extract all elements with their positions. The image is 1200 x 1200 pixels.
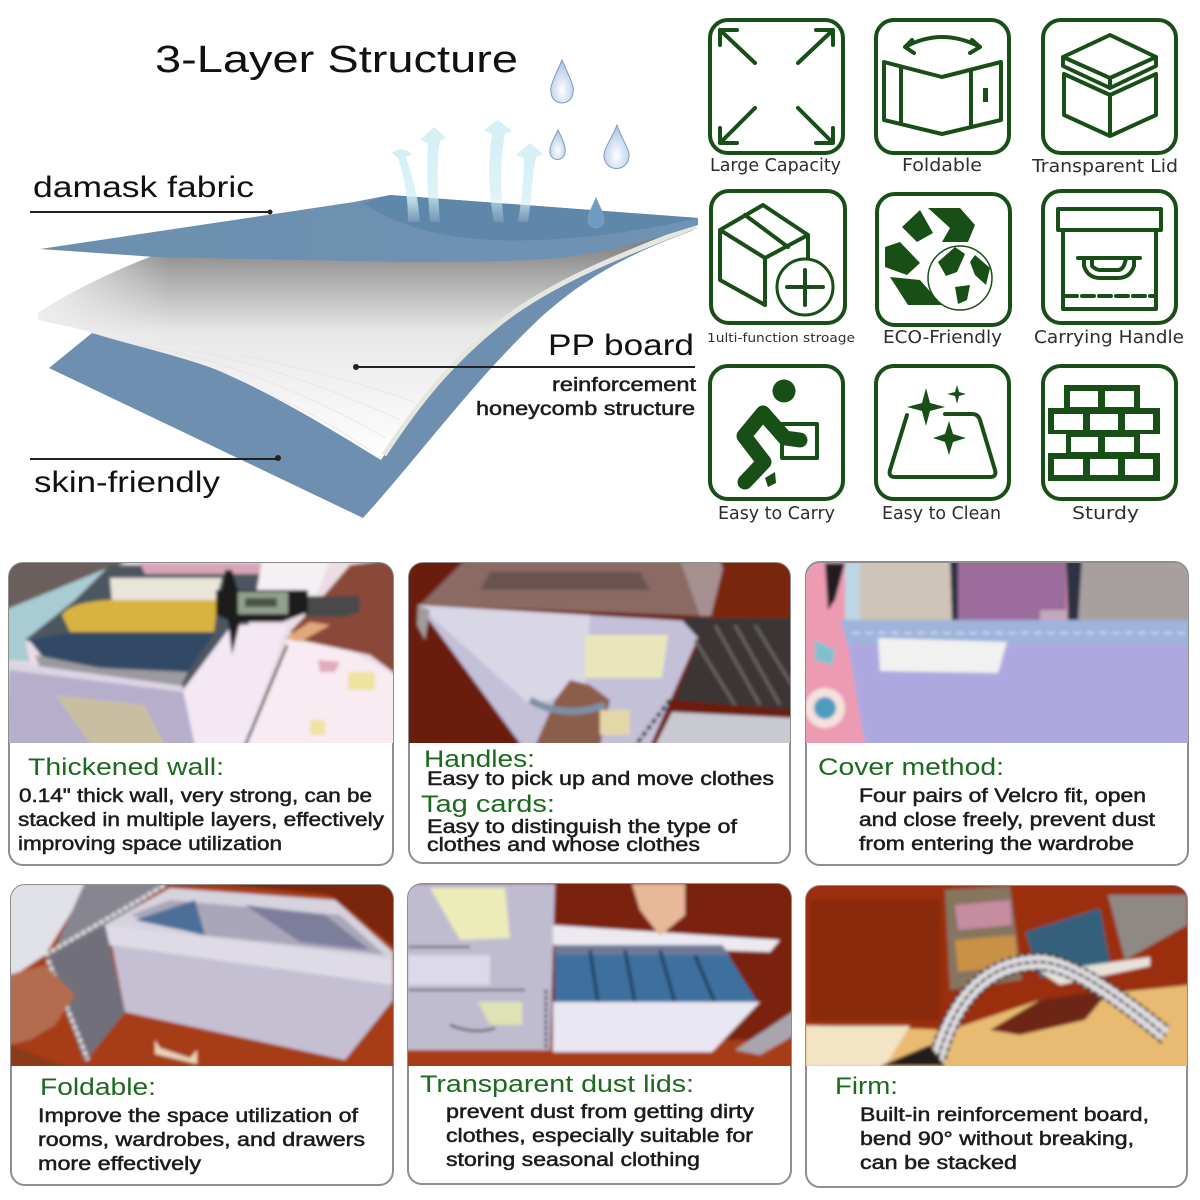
description: bend 90° without breaking,: [860, 1129, 1134, 1150]
photo: caliper on wall: [5, 560, 397, 746]
label: 1ulti-function stroage: [707, 331, 855, 345]
description: tag cards: [427, 817, 738, 856]
label: ECO-Friendly: [883, 327, 1002, 348]
heading: Firm:: [835, 1073, 898, 1100]
heading: Foldable:: [40, 1074, 156, 1101]
description: [18, 786, 385, 855]
layer: bottom skin-friendly fabric: [49, 230, 694, 518]
layer: top damask fabric: [40, 195, 698, 262]
heading: handles: Handles:: [424, 746, 535, 773]
heading: Cover method:: [818, 754, 1004, 781]
label: Transparent Lid: [1031, 156, 1178, 177]
label: Easy to Clean: [882, 503, 1001, 524]
label: Carrying Handle: [1034, 327, 1184, 348]
heading: Thickened wall:: [28, 754, 224, 781]
panel: firm: [802, 882, 1192, 1187]
icon: easy to carry: [710, 366, 843, 499]
icon: foldable: [876, 20, 1009, 153]
icon: transparent lid: [1043, 20, 1176, 153]
description: clothes, especially suitable for: [446, 1126, 754, 1147]
callout: PP board: reinforcement: [552, 375, 697, 396]
layer: PP board: [38, 228, 698, 460]
description: Built-in reinforcement board,: [860, 1105, 1149, 1126]
panel: foldable: [8, 882, 398, 1185]
fabric fold: [363, 195, 698, 240]
callout: damask fabric: damask fabric: [33, 171, 254, 204]
water drops: [550, 60, 629, 228]
label: Foldable: [902, 155, 982, 176]
photo: folding the bin: [8, 882, 398, 1070]
callout: PP board: honeycomb structure: [476, 399, 695, 420]
description: [860, 1105, 1149, 1174]
icon: large capacity: [710, 20, 843, 153]
icon: carrying handle: [1043, 191, 1176, 323]
callout: skin-friendly: [30, 455, 281, 499]
icon: easy to clean: [876, 366, 1009, 499]
description: Four pairs of Velcro fit, open: [859, 786, 1146, 807]
board edge highlight: [384, 226, 696, 455]
description: prevent dust from getting dirty: [446, 1102, 755, 1123]
heading: tag cards: Tag cards:: [421, 791, 555, 818]
description: handles: Easy to pick up and move clothes: [427, 769, 774, 790]
description: stacked in multiple layers, effectively: [18, 810, 385, 831]
description: tag cards: clothes and whose clothes: [427, 835, 700, 856]
panel: transparent dust lids: [405, 880, 795, 1184]
label: Large Capacity: [710, 155, 841, 176]
description: and close freely, prevent dust: [859, 810, 1156, 831]
description: from entering the wardrobe: [859, 834, 1134, 855]
icon: sturdy brick wall: [1043, 366, 1176, 499]
photo: handle and tag card: [405, 560, 795, 746]
description: more effectively: [38, 1154, 202, 1175]
vapor arrows: [392, 120, 543, 222]
description: [38, 1106, 365, 1175]
description: 0.14" thick wall, very strong, can be: [19, 786, 372, 807]
description: improving space utilization: [18, 834, 282, 855]
callout: damask fabric: [30, 171, 272, 214]
description: [446, 1102, 755, 1171]
callout: PP board: PP board: [548, 329, 694, 362]
label: Sturdy: [1072, 503, 1139, 524]
label: Easy to Carry: [718, 503, 835, 524]
diagram: three-layer sheet structure: [38, 60, 698, 518]
panel: handles and tag cards: [405, 560, 795, 863]
title: 3-Layer Structure: [155, 39, 518, 81]
photo: bent reinforcement board: [802, 882, 1192, 1070]
panel: thickened wall: [5, 560, 397, 865]
board left fade: [38, 255, 170, 350]
description: [859, 786, 1156, 855]
callout: PP board: [353, 329, 697, 420]
panel: cover method: [802, 560, 1192, 865]
description: tag cards: Easy to distinguish the type of: [427, 817, 738, 838]
icon: eco-friendly: [877, 194, 1010, 325]
description: storing seasonal clothing: [446, 1150, 700, 1171]
icon: multi-function storage: [711, 191, 845, 323]
description: can be stacked: [860, 1153, 1017, 1174]
description: rooms, wardrobes, and drawers: [38, 1130, 365, 1151]
photo: lifting the lid: [405, 880, 795, 1070]
heading: Transparent dust lids:: [420, 1071, 694, 1098]
photo: velcro on bin: [802, 560, 1192, 746]
description: Improve the space utilization of: [38, 1106, 359, 1127]
board honeycomb ribs: [228, 366, 414, 452]
callout: skin-friendly: skin-friendly: [34, 466, 220, 499]
